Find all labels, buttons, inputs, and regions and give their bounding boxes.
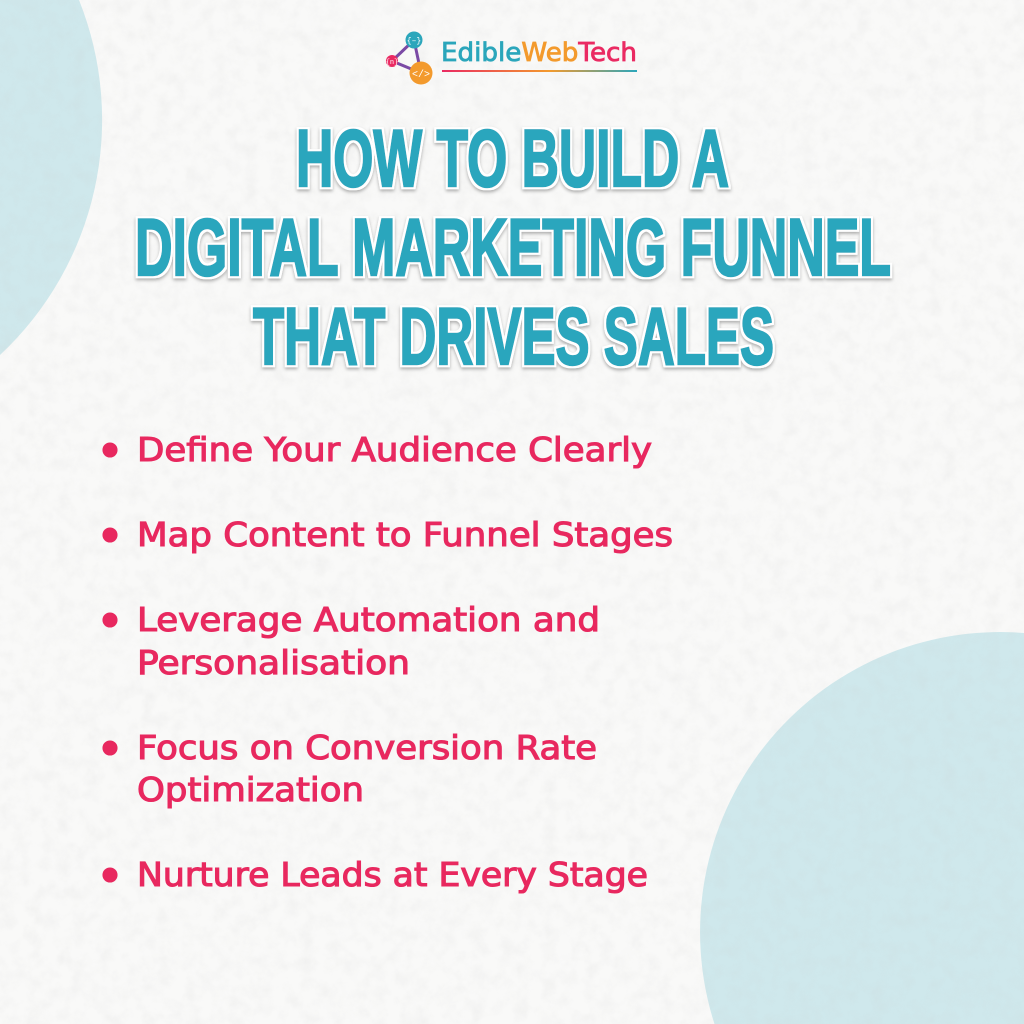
bullet 3: [103, 600, 600, 682]
logo underline: [442, 70, 637, 72]
bullet 5: Nurture Leads at Every Stage: [137, 855, 648, 894]
icon: network nodes: {n}: [386, 59, 398, 67]
bullet 4: [103, 728, 597, 809]
icon: network nodes: {–}: [407, 37, 421, 46]
decorative circle: bottom right: [700, 632, 1024, 1024]
title line 1: HOW TO BUILD A: [296, 114, 729, 204]
bullet 3: Leverage Automation and: [137, 600, 600, 639]
title: [135, 114, 891, 382]
logo: [386, 32, 637, 84]
bullet 2: Map Content to Funnel Stages: [137, 515, 673, 554]
logo wordmark: EdibleWebTech: [441, 38, 637, 68]
decorative circle: top left: [0, 0, 102, 355]
bullet list: [103, 430, 673, 894]
bullet 4: Focus on Conversion Rate: [137, 728, 597, 767]
icon: network nodes: </>: [412, 69, 430, 81]
bullet 4: Optimization: [137, 770, 364, 809]
bullet 1: Define Your Audience Clearly: [137, 430, 652, 469]
bullet 3: Personalisation: [137, 643, 410, 682]
icon: network nodes: [386, 32, 432, 84]
